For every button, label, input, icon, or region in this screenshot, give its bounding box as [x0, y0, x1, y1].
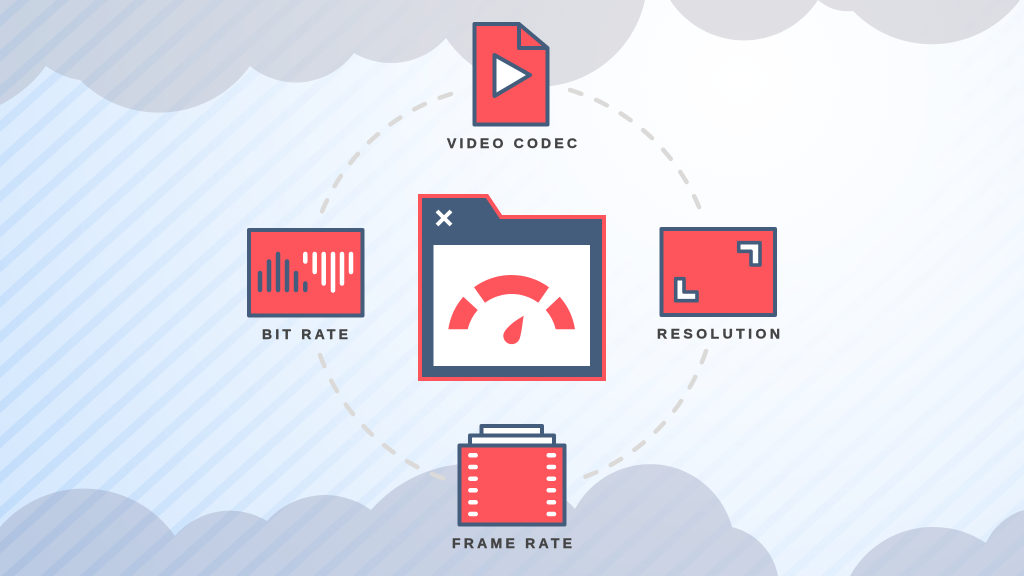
folder window — [434, 245, 590, 366]
cloud: top right — [670, 0, 1020, 44]
label: video codec: VIDEO CODEC — [447, 135, 577, 151]
label: frame rate: FRAME RATE — [452, 535, 572, 551]
icon: film frames — [460, 426, 564, 524]
close icon — [437, 211, 451, 225]
node: bit rate — [249, 230, 362, 342]
node: video codec — [447, 24, 577, 151]
icon: resolution frame — [662, 229, 775, 315]
dashed connector ring — [320, 90, 706, 479]
cloud: bottom right — [850, 510, 1024, 576]
node: resolution — [657, 229, 780, 342]
speedometer gauge — [448, 275, 575, 344]
label: bit rate: BIT RATE — [262, 326, 348, 342]
icon: video file — [474, 24, 548, 124]
label: resolution: RESOLUTION — [657, 326, 780, 342]
cloud: top left band — [0, 0, 645, 113]
folder body — [420, 196, 604, 379]
cloud: bottom band — [0, 463, 778, 576]
central folder with speedometer — [420, 196, 604, 379]
node: frame rate — [452, 426, 572, 551]
icon: bit rate waveform — [249, 230, 362, 316]
